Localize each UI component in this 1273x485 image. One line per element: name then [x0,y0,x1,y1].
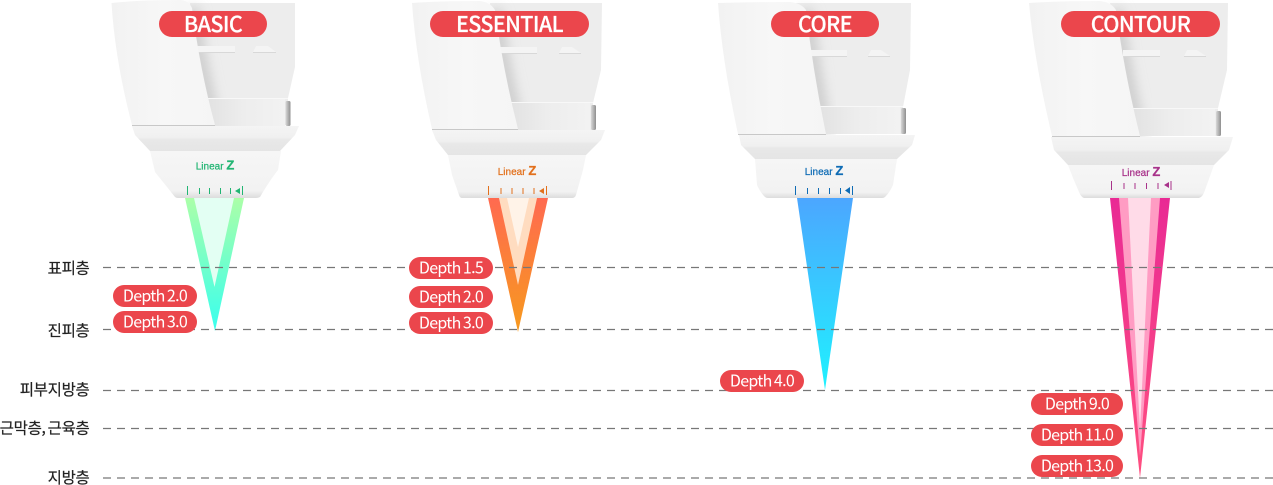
depth tags: BASIC: Depth 3.0 [123,308,188,332]
depth tags: ESSENTIAL: Depth 3.0 [419,310,484,334]
layer labels: 근막층, 근육층 [0,416,90,438]
depth tags: CONTOUR: Depth 9.0 [1045,390,1110,414]
heading: CORE [771,8,879,39]
depth tags: BASIC [113,282,197,333]
beam: CORE [797,198,853,390]
cartridge: CONTOUR [1029,1,1233,198]
cartridge: CORE: Linear Z [805,163,843,178]
cartridge: BASIC [112,0,299,198]
layer labels: 진피층 [48,319,90,341]
cartridge: ESSENTIAL: Linear Z [498,163,536,178]
layer labels: 피부지방층 [20,378,90,400]
depth tags: ESSENTIAL: Depth 2.0 [419,284,484,308]
depth grid lines [103,268,1273,478]
depth tag: CORE: Depth 4.0 [730,368,795,392]
depth tags: CONTOUR: Depth 11.0 [1041,422,1114,446]
layer labels: 표피층 [48,256,90,278]
layer labels [0,256,90,485]
beam: CONTOUR [1110,198,1170,478]
heading: CONTOUR: CONTOUR [1091,8,1191,39]
depth tags: ESSENTIAL [409,254,493,334]
beam: ESSENTIAL [488,198,548,332]
depth tags: CONTOUR [1031,390,1123,477]
heading: BASIC: BASIC [184,8,243,39]
heading: CORE: CORE [798,8,852,39]
heading: BASIC [159,8,267,39]
cartridge: CONTOUR: Linear Z [1122,164,1160,179]
cartridge: CORE [718,2,915,198]
depth tags: ESSENTIAL: Depth 1.5 [419,254,484,278]
beam: BASIC [185,198,244,331]
depth tags: BASIC: Depth 2.0 [123,282,188,306]
heading: ESSENTIAL [430,8,589,39]
cartridge: ESSENTIAL [412,1,605,198]
cartridge: BASIC: Linear Z [196,158,234,172]
heading: CONTOUR [1061,8,1220,39]
heading: ESSENTIAL: ESSENTIAL [456,8,564,39]
depth tags: CONTOUR: Depth 13.0 [1041,452,1114,476]
